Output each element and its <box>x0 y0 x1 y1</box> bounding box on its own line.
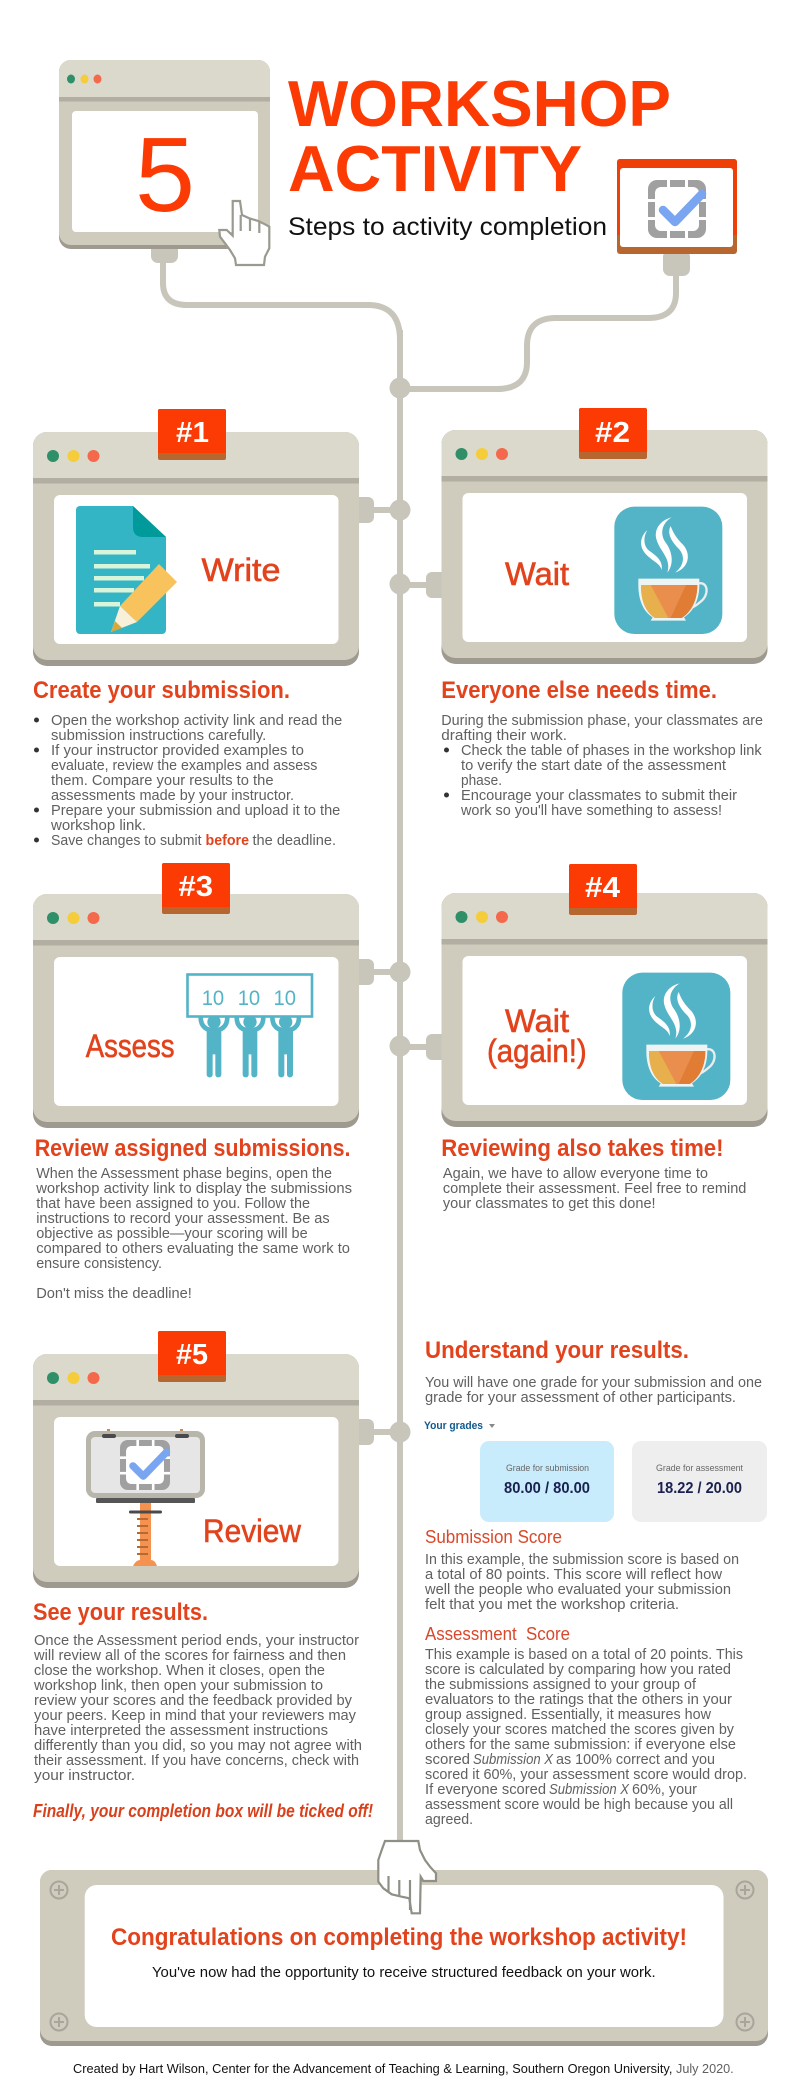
text block: your instructor. <box>34 1767 135 1784</box>
label: Wait (again!) <box>487 1003 587 1069</box>
badge: #1 <box>176 417 209 449</box>
badge <box>158 409 226 460</box>
icon: screws <box>50 1882 754 2030</box>
label: Review: Review <box>203 1513 302 1549</box>
bullet list: before <box>206 832 249 849</box>
badge: #2 <box>595 417 630 449</box>
completion box connector <box>663 250 690 276</box>
grade card: submission: 80.00 / 80.00 <box>504 1480 590 1497</box>
icon: people holding score sign: 10 <box>274 986 296 1010</box>
bullet list: Open the workshop activity link and read the <box>51 712 342 729</box>
assessment score text: closely your scores matched the scores given by <box>425 1721 734 1738</box>
badge <box>569 864 637 915</box>
badge <box>158 1331 226 1382</box>
bullet list: evaluate, review the examples and assess <box>51 757 317 774</box>
badge: #3 <box>178 871 213 903</box>
text block: complete their assessment. Feel free to remind <box>443 1180 746 1197</box>
text block: close the workshop. When it closes, open the <box>34 1662 325 1679</box>
text block: that have been assigned to you. Follow the <box>36 1195 310 1212</box>
text block: work so you'll have something to assess! <box>460 802 722 819</box>
text block: instructions to record your assessment. Be as <box>36 1210 330 1227</box>
icon: pointing hand cursor <box>219 201 269 265</box>
connector <box>350 959 410 985</box>
header window <box>59 60 270 249</box>
text block <box>35 1165 352 1302</box>
label: Wait (again!): Wait <box>505 1003 569 1039</box>
text block: workshop activity link to display the submissions <box>35 1180 352 1197</box>
grade card: assessment: Grade for assessment <box>656 1463 743 1473</box>
panel: step 4 <box>390 864 768 1212</box>
assessment score heading: Assessment Score <box>425 1624 570 1644</box>
assessment score text: assessment score would be high because you all <box>425 1796 733 1813</box>
submission score text: well the people who evaluated your submission <box>424 1581 731 1598</box>
grade card: assessment <box>632 1441 767 1522</box>
icon: billboard with tick <box>86 1429 205 1566</box>
connector <box>390 1034 450 1060</box>
text block: your classmates to get this done! <box>443 1195 656 1212</box>
label: Assess: Assess <box>86 1028 174 1064</box>
assessment score text: others for the same submission: if everyone else <box>425 1736 736 1753</box>
intro text <box>425 1374 762 1406</box>
text block: Once the Assessment period ends, your instructor <box>34 1632 359 1649</box>
intro text: You will have one grade for your submission and one <box>425 1374 762 1391</box>
icon: people holding score sign: 10 <box>238 986 260 1010</box>
header window connector <box>151 240 178 263</box>
assessment score text: Submission X <box>549 1781 630 1798</box>
panel: step 2 <box>390 408 768 819</box>
text block <box>443 1165 746 1212</box>
bullet list: them. Compare your results to the <box>51 772 274 789</box>
grade card: submission: Grade for submission <box>506 1463 589 1473</box>
text block: Encourage your classmates to submit their <box>461 787 737 804</box>
text block: objective as possible—your scoring will be <box>36 1225 308 1242</box>
assessment score text: as 100% correct and you <box>556 1751 715 1768</box>
text block <box>33 1632 362 1784</box>
bullet list: Save changes to submit <box>51 832 202 849</box>
text block: Don't miss the deadline! <box>36 1285 192 1302</box>
intro text: grade for your assessment of other participants. <box>425 1389 736 1406</box>
icon: people holding score sign <box>188 974 312 1077</box>
window <box>33 1354 359 1588</box>
assessment score text: If everyone scored <box>425 1781 546 1798</box>
subtitle: Steps to activity completion <box>288 213 607 241</box>
main vertical cable <box>397 330 403 1842</box>
connector <box>390 572 450 598</box>
text block: phase. <box>461 772 502 789</box>
text block: ensure consistency. <box>36 1255 162 1272</box>
submission score heading: Submission Score <box>425 1527 562 1547</box>
text block: their assessment. If you have concerns, check with <box>34 1752 359 1769</box>
assessment score text: Submission X <box>473 1751 554 1768</box>
assessment score text: scored <box>425 1751 470 1768</box>
label: Wait: Wait <box>505 556 569 592</box>
window <box>33 894 359 1128</box>
assessment score text: the submissions assigned to your group of <box>425 1676 697 1693</box>
icon: tea cup <box>614 507 722 634</box>
submission score text <box>424 1551 739 1613</box>
icon: people holding score sign: 10 <box>202 986 224 1010</box>
your grades label: Your grades <box>424 1420 483 1432</box>
text block: Check the table of phases in the workshop link <box>461 742 762 759</box>
icon: document and pencil <box>76 506 177 634</box>
panel: congratulations <box>40 1841 768 2046</box>
badge: #4 <box>585 872 620 904</box>
label: Wait (again!): (again!) <box>487 1033 587 1069</box>
panel: step 1 <box>33 409 410 849</box>
bullet list: the deadline. <box>252 832 336 849</box>
submission score text: In this example, the submission score is based on <box>425 1551 739 1568</box>
assessment score text: agreed. <box>425 1811 473 1828</box>
text block: have interpreted the assessment instructions <box>34 1722 328 1739</box>
heading: Everyone else needs time. <box>441 677 717 704</box>
text block: differently than you did, so you may not agree with <box>34 1737 362 1754</box>
heading: Create your submission. <box>33 677 290 704</box>
window <box>33 432 359 666</box>
icon: tea cup <box>622 973 730 1100</box>
text block: drafting their work. <box>441 727 567 744</box>
assessment score text <box>425 1646 747 1828</box>
bullet list: assessments made by your instructor. <box>51 787 294 804</box>
text block <box>441 712 763 819</box>
bullet list: workshop link. <box>50 817 146 834</box>
text: You've now had the opportunity to receive structured feedback on your work. <box>152 1964 656 1981</box>
text block: will review all of the scores for fairness and then <box>33 1647 346 1664</box>
cable from completion box <box>400 270 676 389</box>
label: Write: Write <box>202 552 280 588</box>
title <box>288 67 671 205</box>
completion box icon <box>617 159 737 254</box>
bullet list: If your instructor provided examples to <box>51 742 304 759</box>
badge <box>579 408 647 459</box>
footer credit: July 2020. <box>676 2061 734 2076</box>
grade card: submission <box>480 1441 614 1522</box>
title: ACTIVITY <box>288 132 582 205</box>
grade card: assessment: 18.22 / 20.00 <box>657 1480 742 1497</box>
footer credit: Created by Hart Wilson, Center for the Advancement of Teaching & Learning, Southern Oregon University, <box>73 2061 672 2076</box>
assessment score text: scored it 60%, your assessment score would drop. <box>425 1766 747 1783</box>
panel: understand your results <box>424 1337 767 1828</box>
submission score text: a total of 80 points. This score will reflect how <box>425 1566 722 1583</box>
submission score text: felt that you met the workshop criteria. <box>425 1596 679 1613</box>
heading: Understand your results. <box>425 1337 689 1364</box>
badge: #5 <box>176 1339 208 1371</box>
connector <box>350 497 410 523</box>
header window: 5 <box>135 116 195 234</box>
assessment score text: evaluators to the ratings that the others in your <box>425 1691 732 1708</box>
heading: Review assigned submissions. <box>35 1135 350 1162</box>
badge <box>162 863 230 914</box>
title: WORKSHOP <box>288 67 671 140</box>
text block: workshop link, then open your submission to <box>33 1677 323 1694</box>
callout: completion note: Finally, your completion box will be ticked off! <box>33 1801 373 1821</box>
assessment score text: 60%, your <box>632 1781 697 1798</box>
bullet list: Prepare your submission and upload it to the <box>51 802 340 819</box>
connector <box>350 1419 410 1445</box>
text block: your peers. Keep in mind that your reviewers may <box>34 1707 356 1724</box>
text block: When the Assessment phase begins, open the <box>36 1165 332 1182</box>
text block: compared to others evaluating the same work to <box>36 1240 350 1257</box>
bullet list: submission instructions carefully. <box>51 727 266 744</box>
junction node <box>390 378 410 398</box>
icon: pointing hand <box>378 1841 436 1913</box>
text block: During the submission phase, your classmates are <box>441 712 763 729</box>
panel: step 3 <box>33 863 410 1302</box>
panel: step 5 <box>33 1331 410 1821</box>
bullet list <box>34 712 342 849</box>
cable from header window <box>163 260 400 340</box>
text block: Again, we have to allow everyone time to <box>443 1165 708 1182</box>
assessment score text: group assigned. Essentially, it measures how <box>425 1706 711 1723</box>
text block: to verify the start date of the assessment <box>461 757 727 774</box>
heading: Reviewing also takes time! <box>441 1135 724 1162</box>
assessment score text: score is calculated by comparing how you rated <box>425 1661 731 1678</box>
window <box>442 430 768 664</box>
assessment score text: This example is based on a total of 20 points. This <box>425 1646 743 1663</box>
heading: See your results. <box>33 1599 208 1626</box>
heading: Congratulations on completing the workshop activity! <box>111 1924 687 1951</box>
window <box>442 893 768 1127</box>
text block: review your scores and the feedback provided by <box>34 1692 352 1709</box>
